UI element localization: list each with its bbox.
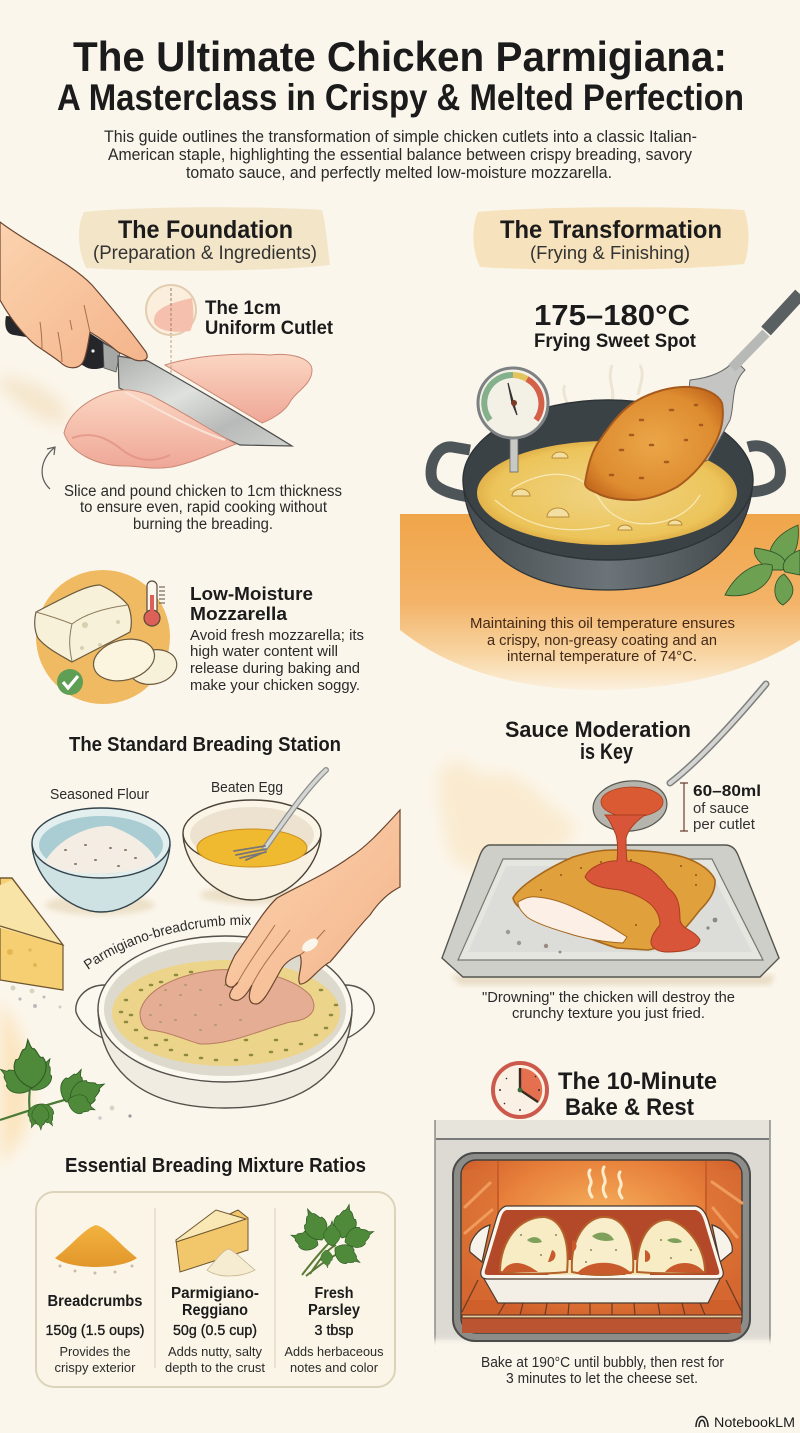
curved label: parmigiano-breadcrumb mix: Parmigiano-breadcrumb mix (83, 914, 251, 970)
callout: sauce quantity: 60–80ml (693, 783, 761, 800)
cutlet (513, 850, 715, 950)
tray outer (442, 845, 779, 977)
ladle handle (670, 684, 766, 783)
baking dish handles (470, 1225, 732, 1262)
text: mozzarella: release during baking and (190, 660, 360, 677)
text: mozzarella: Mozzarella (190, 603, 288, 624)
icon: basil (725, 525, 800, 605)
label: seasoned flour: Seasoned Flour (50, 787, 149, 803)
text: parsley: Adds herbaceous (284, 1344, 384, 1359)
text: breadcrumbs: Breadcrumbs (48, 1293, 142, 1310)
dish interior (483, 1208, 721, 1277)
text: oil temperature (470, 615, 735, 665)
icon: clock (493, 1063, 547, 1117)
text: parmigiano: 50g (0.5 cup) (173, 1323, 257, 1339)
crumbs (10, 986, 16, 990)
heading: 1cm cutlet: Uniform Cutlet (205, 318, 334, 339)
orange circle (36, 570, 170, 704)
back chicken breast (165, 354, 312, 423)
text: slice and pound (64, 483, 342, 533)
text: parmigiano: Reggiano (182, 1302, 248, 1319)
cheese block (35, 585, 131, 662)
soft shadow (0, 375, 70, 425)
icon: cutlet thickness circle (146, 285, 196, 335)
text: slice and pound: Slice and pound chicken to 1cm thickness (64, 483, 342, 500)
specks (506, 930, 510, 934)
steam (564, 365, 642, 420)
fork (265, 770, 326, 848)
front chicken breast (64, 390, 236, 468)
rack (462, 1280, 742, 1318)
text: parmigiano (165, 1285, 265, 1375)
knife blade (118, 356, 292, 446)
stain behind sauce (438, 760, 576, 872)
illustration: oven (428, 1120, 778, 1356)
logo: notebooklm: NotebookLM (714, 1414, 795, 1430)
oven body (435, 1120, 770, 1350)
slices (126, 645, 180, 689)
intro paragraph: This guide outlines the transformation of simple chicken cutlets into a classic Italian- (104, 127, 697, 146)
heading: frying temperature (534, 300, 697, 352)
label: beaten egg: Beaten Egg (211, 780, 283, 796)
illustration: hand slicing chicken (0, 222, 312, 489)
icon: egg bowl (183, 770, 326, 904)
text: mozzarella: make your chicken soggy. (190, 677, 360, 694)
text: mozzarella: Avoid fresh mozzarella; its (190, 627, 364, 644)
text: parsley (284, 1285, 384, 1375)
text: mozzarella (190, 583, 364, 694)
text: mozzarella: Low-Moisture (190, 583, 313, 604)
heading: bake and rest (558, 1068, 717, 1121)
text: parsley: Parsley (308, 1302, 360, 1319)
thermometer (147, 581, 157, 615)
callout: sauce quantity: of sauce (693, 800, 749, 817)
text: oil temperature: Maintaining this oil temperature ensures (470, 615, 735, 632)
heading: mixture ratios: Essential Breading Mixture Ratios (65, 1155, 366, 1177)
icon: flour bowl (32, 808, 170, 915)
fried cutlet (585, 387, 723, 500)
tray shadow (450, 975, 775, 985)
hand (226, 810, 400, 1004)
floor (462, 1317, 741, 1333)
bubbles (512, 452, 682, 530)
cheese mounds (500, 1217, 568, 1274)
text: drowning: crunchy texture you just fried. (512, 1005, 705, 1022)
intro paragraph: American staple, highlighting the essential balance between crispy breading, savory (108, 145, 692, 164)
handles (76, 985, 112, 1040)
heading: the foundation (79, 207, 330, 271)
icon: parmesan (176, 1210, 255, 1276)
heading: frying temperature: 175–180°C (534, 300, 690, 332)
heading: bake and rest: The 10-Minute (558, 1068, 717, 1095)
check badge (57, 669, 83, 695)
text: drowning (482, 989, 735, 1022)
heading: the transformation (473, 207, 748, 270)
icon: breadcrumb pile (55, 1225, 137, 1274)
text: oil temperature: internal temperature of 74°C. (507, 648, 697, 665)
sauce in ladle (601, 787, 663, 817)
text: parmigiano: depth to the crust (165, 1360, 265, 1375)
gauge face (478, 368, 548, 438)
text: mozzarella: high water content will (190, 643, 338, 660)
cut face (518, 897, 627, 943)
illustration: sauce on tray (442, 684, 779, 985)
1cm guide line (170, 290, 172, 392)
cheese specks (520, 1235, 692, 1262)
text: breadcrumbs: Provides the (60, 1344, 130, 1359)
arrow (42, 447, 55, 489)
heading: 1cm cutlet: The 1cm (205, 298, 281, 319)
text: bake: Bake at 190°C until bubbly, then rest for (481, 1355, 724, 1371)
crumb mixture (112, 960, 340, 1066)
text: oil temperature: a crispy, non-greasy coating and an (487, 632, 717, 649)
heading: breading station: The Standard Breading Station (69, 734, 341, 756)
text: parmigiano: Parmigiano- (171, 1285, 259, 1302)
sauce pour (585, 815, 700, 952)
text: breadcrumbs: 150g (1.5 oups) (46, 1323, 144, 1339)
brush band (79, 207, 330, 271)
heading: the transformation: (Frying & Finishing) (530, 242, 690, 263)
text: bake: 3 minutes to let the cheese set. (506, 1371, 698, 1387)
cheese between mounds (548, 1260, 650, 1275)
pan rim (463, 400, 753, 560)
orange band (400, 514, 800, 690)
hand (0, 222, 147, 368)
body (98, 1010, 352, 1108)
text: parsley: notes and color (290, 1360, 379, 1375)
text: parsley: Fresh (314, 1285, 354, 1302)
intro paragraph (104, 127, 697, 182)
text: slice and pound: to ensure even, rapid cooking without (80, 499, 328, 516)
text: breadcrumbs: crispy exterior (54, 1360, 136, 1375)
text: bake (481, 1355, 724, 1387)
text: parsley: 3 tbsp (314, 1323, 354, 1339)
text: drowning: "Drowning" the chicken will destroy the (482, 989, 735, 1006)
gauge stem (510, 436, 518, 472)
heading: sauce moderation: Sauce Moderation (505, 717, 691, 742)
icon: mozzarella (35, 570, 180, 704)
pan body (463, 480, 753, 590)
oil (477, 441, 737, 545)
title: The Ultimate Chicken Parmigiana: (73, 33, 727, 80)
text: parmigiano: Adds nutty, salty (168, 1344, 262, 1359)
title (57, 33, 744, 118)
panel: ratios (36, 1192, 395, 1387)
oven window (453, 1153, 750, 1341)
heading: sauce moderation (505, 717, 691, 764)
tray inner (458, 859, 763, 960)
icon: parsley bunch (288, 1202, 377, 1276)
fade at bottom (428, 1340, 778, 1356)
steam (589, 1167, 622, 1198)
heading: bake and rest: Bake & Rest (565, 1094, 694, 1121)
icon: breadcrumb dish (76, 810, 400, 1120)
intro paragraph: tomato sauce, and perfectly melted low-moisture mozzarella. (186, 163, 612, 182)
side walls (462, 1170, 741, 1300)
brush band (473, 207, 748, 270)
crumbs (110, 1106, 114, 1110)
text: slice and pound: burning the breading. (133, 516, 273, 533)
callout: sauce quantity (680, 783, 761, 833)
dish body (483, 1277, 721, 1303)
rim (98, 936, 352, 1082)
wash: lower left (0, 1000, 30, 1165)
heading: the foundation: (Preparation & Ingredients) (93, 243, 317, 264)
knife handle (5, 316, 116, 369)
rack rails (465, 1182, 742, 1237)
basil on cheese (527, 1233, 682, 1243)
icon: parmesan wedge (0, 878, 63, 1008)
illustration: frying pan (431, 294, 800, 590)
heading: the foundation: The Foundation (118, 216, 293, 244)
icon: parsley sprig left (0, 1038, 110, 1131)
ladle bowl (591, 777, 669, 835)
heading: frying temperature: Frying Sweet Spot (534, 331, 697, 352)
chicken (140, 970, 314, 1044)
text: breadcrumbs (46, 1293, 144, 1375)
knife bolster (103, 343, 120, 372)
callout: sauce quantity: per cutlet (693, 816, 756, 833)
handles (431, 447, 480, 498)
heading: 1cm cutlet (205, 298, 334, 339)
spatula (680, 360, 745, 472)
heading: the transformation: The Transformation (500, 216, 722, 244)
heading: sauce moderation: is Key (580, 739, 633, 764)
